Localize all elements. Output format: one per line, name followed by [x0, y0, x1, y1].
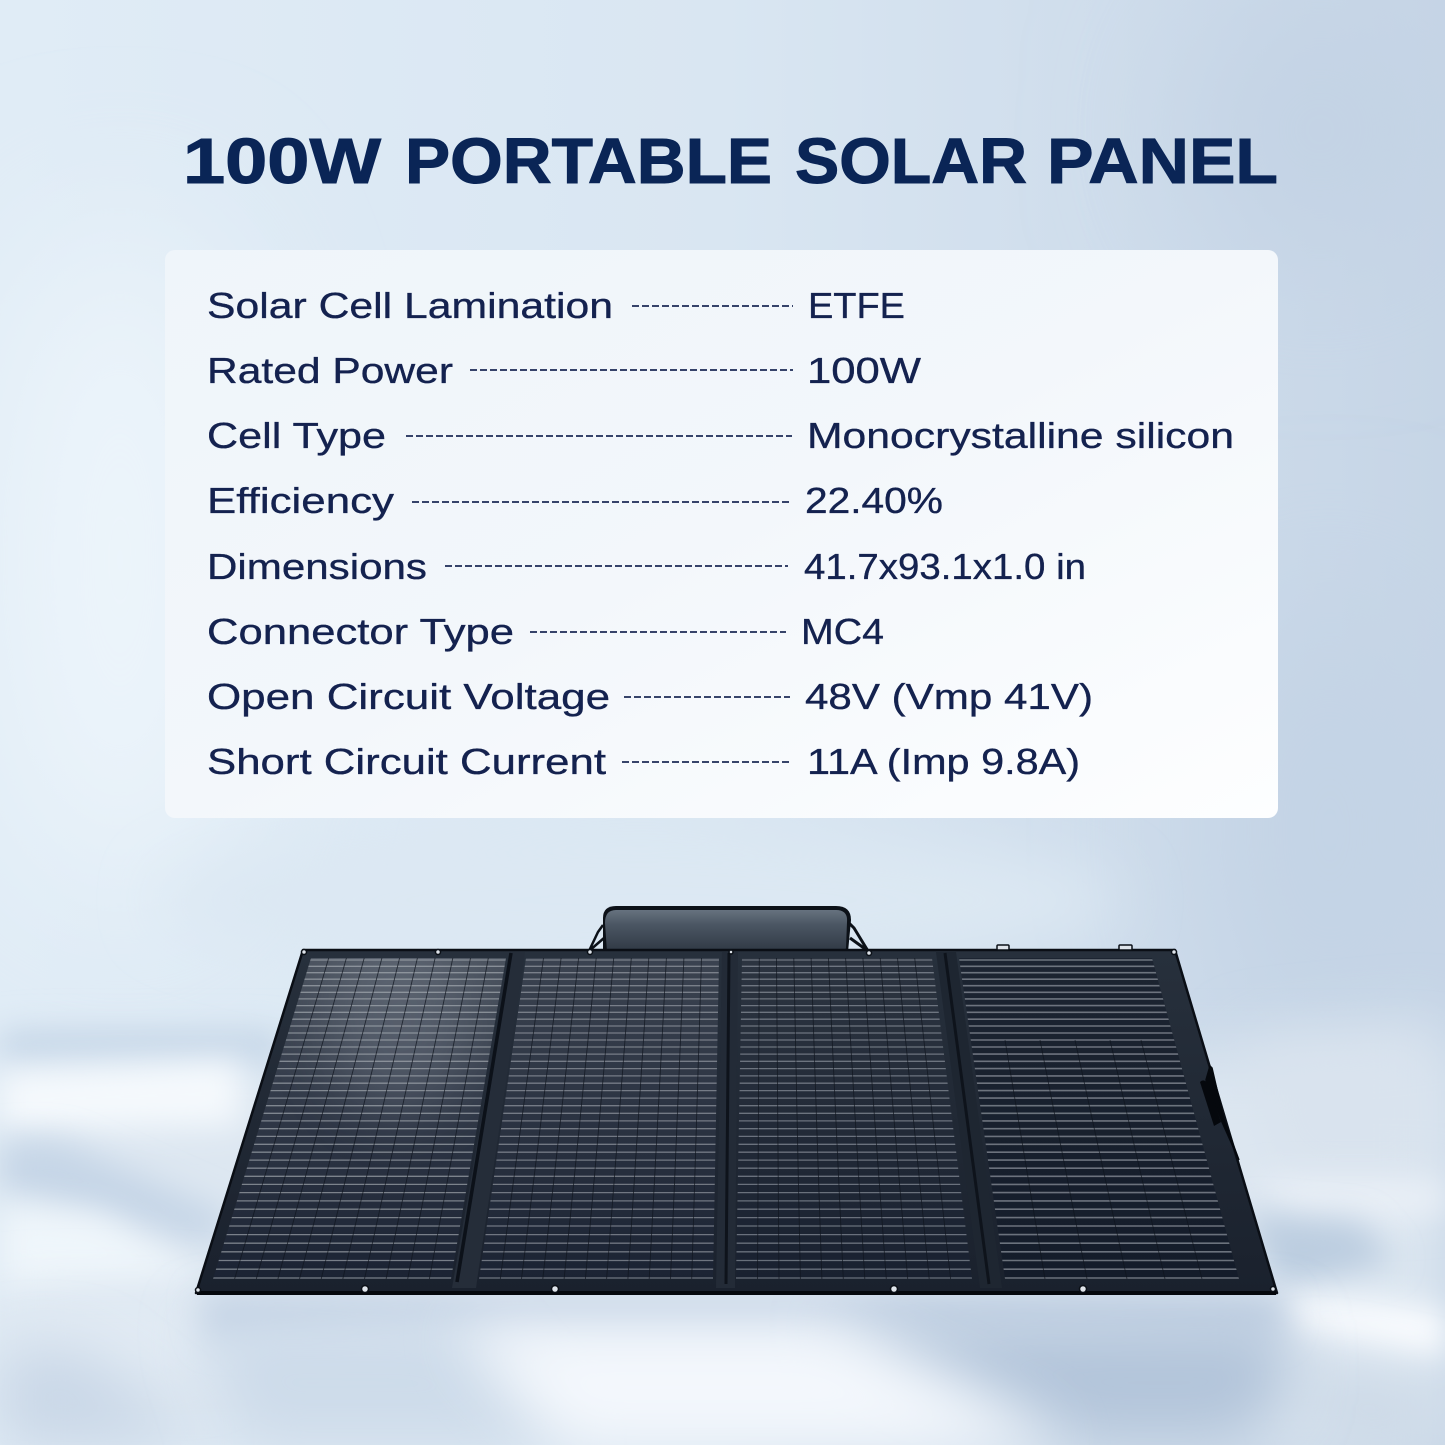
side carry handle — [1200, 1066, 1239, 1160]
panel outer frame — [196, 950, 1277, 1293]
row: solar cell lamination — [207, 285, 905, 326]
panel: specifications table — [165, 250, 1278, 818]
title: PORTABLE — [405, 125, 772, 197]
row: connector type — [207, 611, 884, 652]
cell block 1 — [213, 958, 506, 1279]
row: short circuit current: Short Circuit Current — [207, 741, 606, 782]
cell block 3 — [736, 958, 972, 1279]
row: cell type — [207, 415, 1234, 456]
fold: centre — [716, 952, 738, 1288]
row: connector type: MC4 — [801, 611, 884, 652]
row: cell type: Cell Type — [207, 415, 386, 456]
row: rated power: Rated Power — [207, 350, 453, 391]
row: rated power: 100W — [807, 350, 921, 391]
cell block 4 — [959, 958, 1239, 1279]
row: solar cell lamination: ETFE — [808, 285, 905, 326]
row: efficiency: 22.40% — [805, 480, 943, 521]
grommets and fixings — [196, 945, 1276, 1292]
bottom edge — [197, 1291, 1276, 1295]
title: SOLAR — [795, 125, 1027, 197]
title: PANEL — [1047, 125, 1278, 197]
row: open circuit voltage: Open Circuit Voltage — [207, 676, 610, 717]
row: short circuit current: 11A (Imp 9.8A) — [807, 741, 1080, 782]
row: connector type: Connector Type — [207, 611, 514, 652]
row: dimensions: Dimensions — [207, 546, 427, 587]
row: efficiency: Efficiency — [207, 480, 394, 521]
row: open circuit voltage: 48V (Vmp 41V) — [805, 676, 1093, 717]
carry bag handle — [589, 906, 868, 952]
cell block 2 — [479, 958, 719, 1279]
row: dimensions — [207, 546, 1086, 587]
row: efficiency — [207, 480, 943, 521]
title: 100W — [183, 125, 382, 197]
row: short circuit current — [207, 741, 1080, 782]
fold: left — [452, 952, 525, 1288]
table card background — [165, 250, 1278, 818]
row: open circuit voltage — [207, 676, 1093, 717]
panel edges — [196, 950, 1277, 1293]
row: rated power — [207, 350, 921, 391]
row: solar cell lamination: Solar Cell Lamination — [207, 285, 613, 326]
row: dimensions: 41.7x93.1x1.0 in — [804, 546, 1086, 587]
row: cell type: Monocrystalline silicon — [807, 415, 1234, 456]
fold: right — [936, 952, 1002, 1288]
solar panel product image — [190, 906, 1290, 1293]
